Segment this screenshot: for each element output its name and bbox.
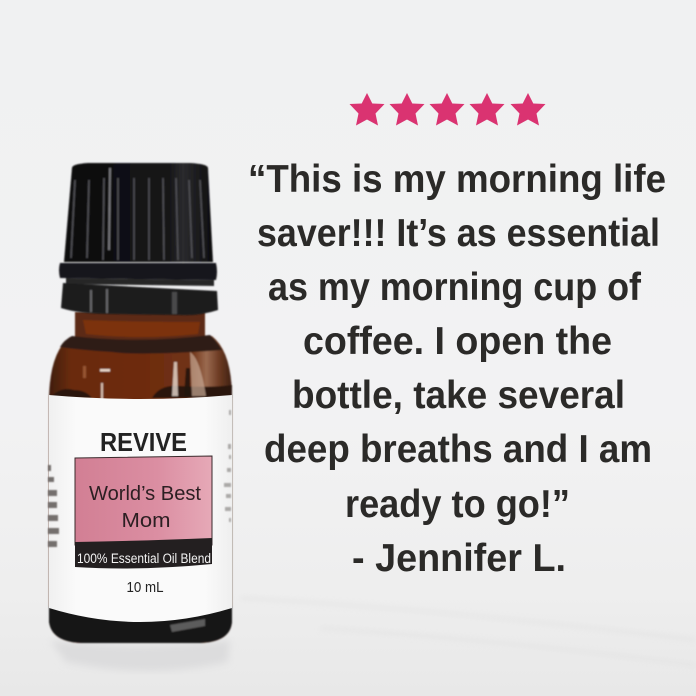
testimonial quote: bottle, take several xyxy=(292,374,625,417)
white label xyxy=(48,395,232,622)
attribution: - Jennifer L. xyxy=(352,537,566,580)
amber glass body xyxy=(49,312,232,643)
cap lower ring xyxy=(61,283,218,315)
product bottle xyxy=(48,163,232,671)
strip text: 100% Essential Oil Blend xyxy=(77,551,211,566)
five pink stars rating xyxy=(350,93,546,126)
testimonial quote: coffee. I open the xyxy=(303,320,612,363)
testimonial quote: deep breaths and I am xyxy=(264,428,652,471)
testimonial quote: “This is my morning life xyxy=(248,158,666,201)
bottle reflection xyxy=(50,640,230,671)
side label print right xyxy=(224,410,231,522)
cap upper ring xyxy=(59,263,217,280)
testimonial quote: ready to go!” xyxy=(345,483,570,526)
brand name: REVIVE xyxy=(100,427,187,457)
black strip xyxy=(75,538,212,568)
blend name: Mom xyxy=(122,509,170,532)
testimonial quote: as my morning cup of xyxy=(268,266,641,309)
blend name: World’s Best xyxy=(89,482,201,505)
pink name panel xyxy=(75,456,212,545)
testimonial quote: saver!!! It’s as essential xyxy=(257,212,660,255)
black dropper cap xyxy=(59,163,218,315)
testimonial quote xyxy=(248,158,666,580)
table streaks xyxy=(240,598,696,665)
volume: 10 mL xyxy=(126,579,164,596)
blend name xyxy=(89,482,201,532)
side label print left xyxy=(48,465,59,547)
